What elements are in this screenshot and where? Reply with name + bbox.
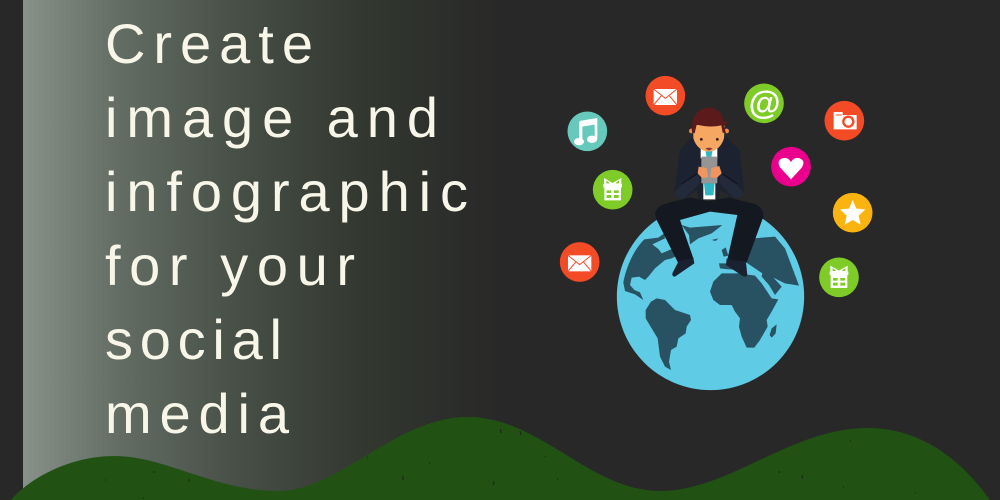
green hills xyxy=(11,417,990,500)
globe xyxy=(617,203,804,390)
phone xyxy=(701,157,717,183)
shoes xyxy=(672,258,747,277)
title: infographic xyxy=(105,160,468,223)
icon: music note xyxy=(567,111,607,151)
shirt xyxy=(701,147,717,199)
gradient panel xyxy=(23,0,500,500)
jacket xyxy=(674,137,744,199)
icon: heart xyxy=(771,147,811,186)
sleeves xyxy=(675,174,744,199)
head xyxy=(693,125,725,152)
person xyxy=(655,107,763,277)
tie xyxy=(704,150,715,195)
title: for your xyxy=(105,234,355,297)
hair xyxy=(692,107,728,133)
icon: camera xyxy=(824,101,864,140)
continents xyxy=(623,225,799,370)
title: media xyxy=(105,382,290,445)
title: image and xyxy=(105,86,438,149)
icon: star xyxy=(833,193,872,232)
globe with person and icons xyxy=(560,76,872,390)
icon: mail lower xyxy=(560,242,599,282)
hands xyxy=(698,166,722,178)
icon: gift left xyxy=(593,170,632,209)
trousers xyxy=(655,197,763,263)
icon: at sign: @ xyxy=(748,84,780,121)
title: Create xyxy=(105,12,313,75)
title xyxy=(105,12,468,445)
icon: gift right xyxy=(819,257,859,297)
icon: mail xyxy=(645,76,685,115)
title: social xyxy=(105,308,282,371)
